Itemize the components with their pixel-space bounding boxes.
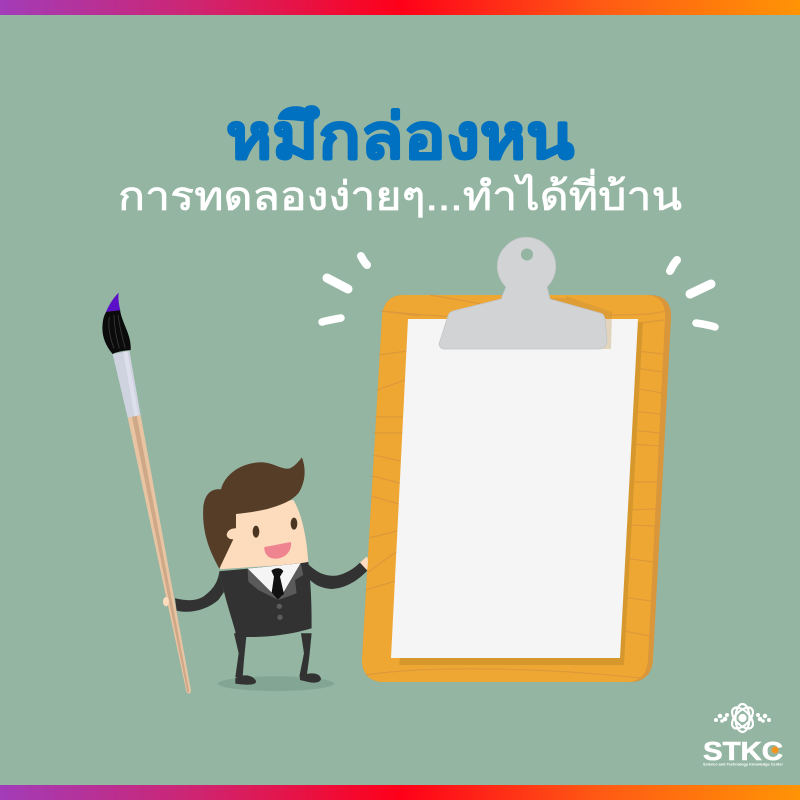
bristle streaks xyxy=(109,315,125,348)
purple paint tip xyxy=(106,293,120,312)
logo atom icon xyxy=(728,704,757,732)
clip hole xyxy=(521,248,533,260)
right hand xyxy=(359,557,368,570)
logo orange dot xyxy=(772,746,778,754)
eyes xyxy=(253,526,259,538)
bristles xyxy=(102,310,131,354)
right arm xyxy=(306,562,367,589)
ground shadow xyxy=(218,676,334,691)
businessman xyxy=(163,457,368,691)
necktie xyxy=(271,568,284,599)
ear xyxy=(226,529,236,539)
bottom gradient bar xyxy=(0,785,800,800)
metal clip xyxy=(439,237,607,349)
suit buttons xyxy=(277,604,282,609)
ferrule xyxy=(113,351,141,418)
handle shade xyxy=(132,416,189,692)
face xyxy=(220,500,308,569)
left arm xyxy=(175,571,224,612)
mouth xyxy=(264,542,291,559)
ferrule highlight xyxy=(123,351,139,416)
clipboard board xyxy=(362,295,665,682)
legs and shoes xyxy=(234,633,321,685)
logo dots xyxy=(714,713,771,723)
shine marks right xyxy=(670,260,715,327)
clipboard board edge shadow xyxy=(362,295,671,682)
brush handle xyxy=(128,415,191,693)
left hand xyxy=(163,597,169,606)
logo wordmark: STKC xyxy=(703,736,783,766)
logo tagline: Science and Technology Knowledge Center xyxy=(703,762,784,766)
subtitle: การทดลองง่ายๆ...ทำได้ที่บ้าน xyxy=(118,169,682,219)
title: หมึกล่องหน xyxy=(226,103,574,172)
shine marks left xyxy=(322,256,367,322)
clipboard xyxy=(362,237,671,682)
paper xyxy=(391,319,638,658)
paintbrush xyxy=(102,293,191,693)
lapels xyxy=(248,563,303,600)
clip shadow xyxy=(550,296,612,349)
suit body xyxy=(219,562,312,637)
top gradient bar xyxy=(0,0,800,15)
shirt collar xyxy=(248,563,301,598)
hair xyxy=(203,457,305,569)
wood grain lines xyxy=(366,295,666,678)
paper shadow xyxy=(399,322,643,665)
STKC logo xyxy=(703,704,784,766)
